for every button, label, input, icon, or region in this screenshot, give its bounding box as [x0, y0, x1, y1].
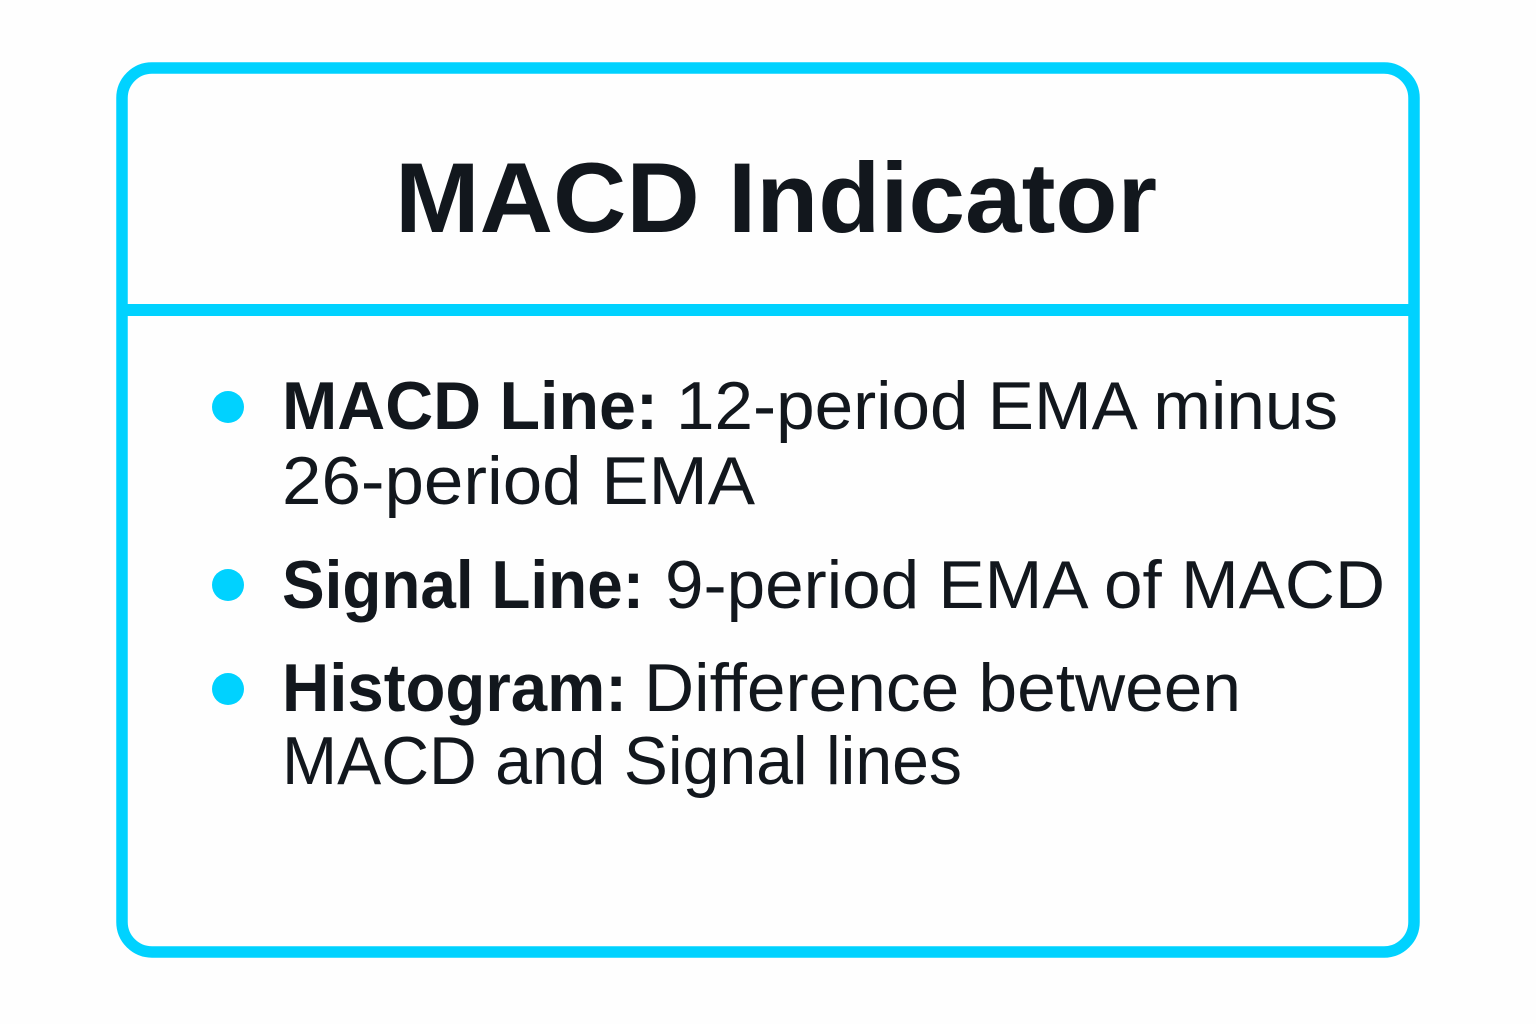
text block: histogram: Histogram: — [282, 650, 627, 726]
bullet icon: MACD line — [212, 391, 244, 423]
header divider — [122, 304, 1414, 316]
text block: MACD line: MACD Line: — [282, 368, 658, 444]
bullet icon: histogram — [212, 673, 244, 705]
bullet icon: signal line — [212, 569, 244, 601]
text block: MACD line: 26-period EMA — [282, 443, 756, 519]
panel: MACD indicator card — [122, 68, 1414, 952]
text block: MACD line: 12-period EMA minus — [676, 368, 1338, 444]
text block: signal line — [282, 547, 1385, 623]
text block: histogram — [282, 650, 1241, 799]
card frame — [122, 68, 1414, 952]
text block: signal line: Signal Line: — [282, 547, 644, 623]
text block: histogram: Difference between — [644, 650, 1241, 726]
text block: MACD line — [282, 368, 1338, 519]
text block: signal line: 9-period EMA of MACD — [665, 547, 1385, 623]
text block: histogram: MACD and Signal lines — [282, 723, 962, 799]
title: MACD Indicator — [395, 142, 1157, 253]
